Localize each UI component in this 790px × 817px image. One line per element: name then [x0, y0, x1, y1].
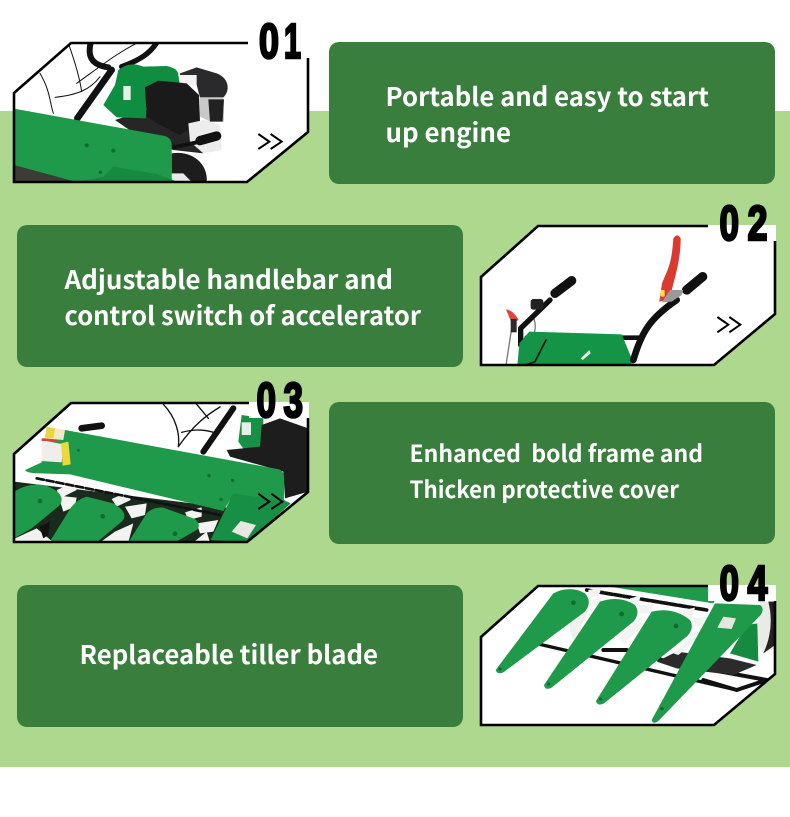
number 03: 0 [256, 374, 276, 428]
image: tiller blades [481, 586, 775, 725]
image: handlebar and red lever [481, 226, 775, 365]
arrow chevrons [258, 134, 282, 149]
number 04 [708, 557, 776, 611]
text: portable engine: Portable and easy to start [386, 77, 709, 114]
outline [481, 586, 775, 725]
panel: text 02 [17, 225, 463, 367]
number 04: 0 [720, 557, 739, 611]
image: bold frame and cover [14, 403, 308, 542]
number 01 [259, 15, 301, 69]
number 03: 3 [284, 374, 303, 428]
outline [481, 226, 775, 365]
text: portable engine: up engine [386, 113, 511, 150]
panel: feature 02 handlebar [481, 197, 776, 365]
panel: text 04 [17, 585, 463, 727]
text: enhanced frame: Thicken protective cover [410, 471, 680, 505]
number 02 [708, 197, 776, 251]
number 02: 0 [720, 197, 739, 251]
number 02: 2 [748, 197, 768, 251]
panel: text 03 [329, 402, 775, 544]
text: adjustable handlebar: Adjustable handlebar and [63, 260, 393, 297]
panel: text 01 [329, 42, 775, 184]
panel: feature 03 frame [14, 374, 309, 542]
number 04: 4 [748, 557, 768, 611]
number 03 [249, 374, 309, 428]
panel: feature 01 engine [14, 15, 308, 182]
image: engine close-up [14, 43, 308, 182]
panel: feature 04 blades [481, 557, 776, 725]
number 01: 1 [284, 15, 301, 69]
text: adjustable handlebar: control switch of accelerator [64, 296, 422, 333]
text: enhanced frame: Enhanced bold frame and [410, 435, 703, 469]
arrow chevrons [717, 317, 740, 332]
number 01: 0 [259, 15, 279, 69]
outline [14, 43, 308, 182]
outline [14, 403, 308, 542]
text: replaceable blade: Replaceable tiller blade [80, 635, 378, 672]
arrow chevrons [258, 494, 282, 509]
